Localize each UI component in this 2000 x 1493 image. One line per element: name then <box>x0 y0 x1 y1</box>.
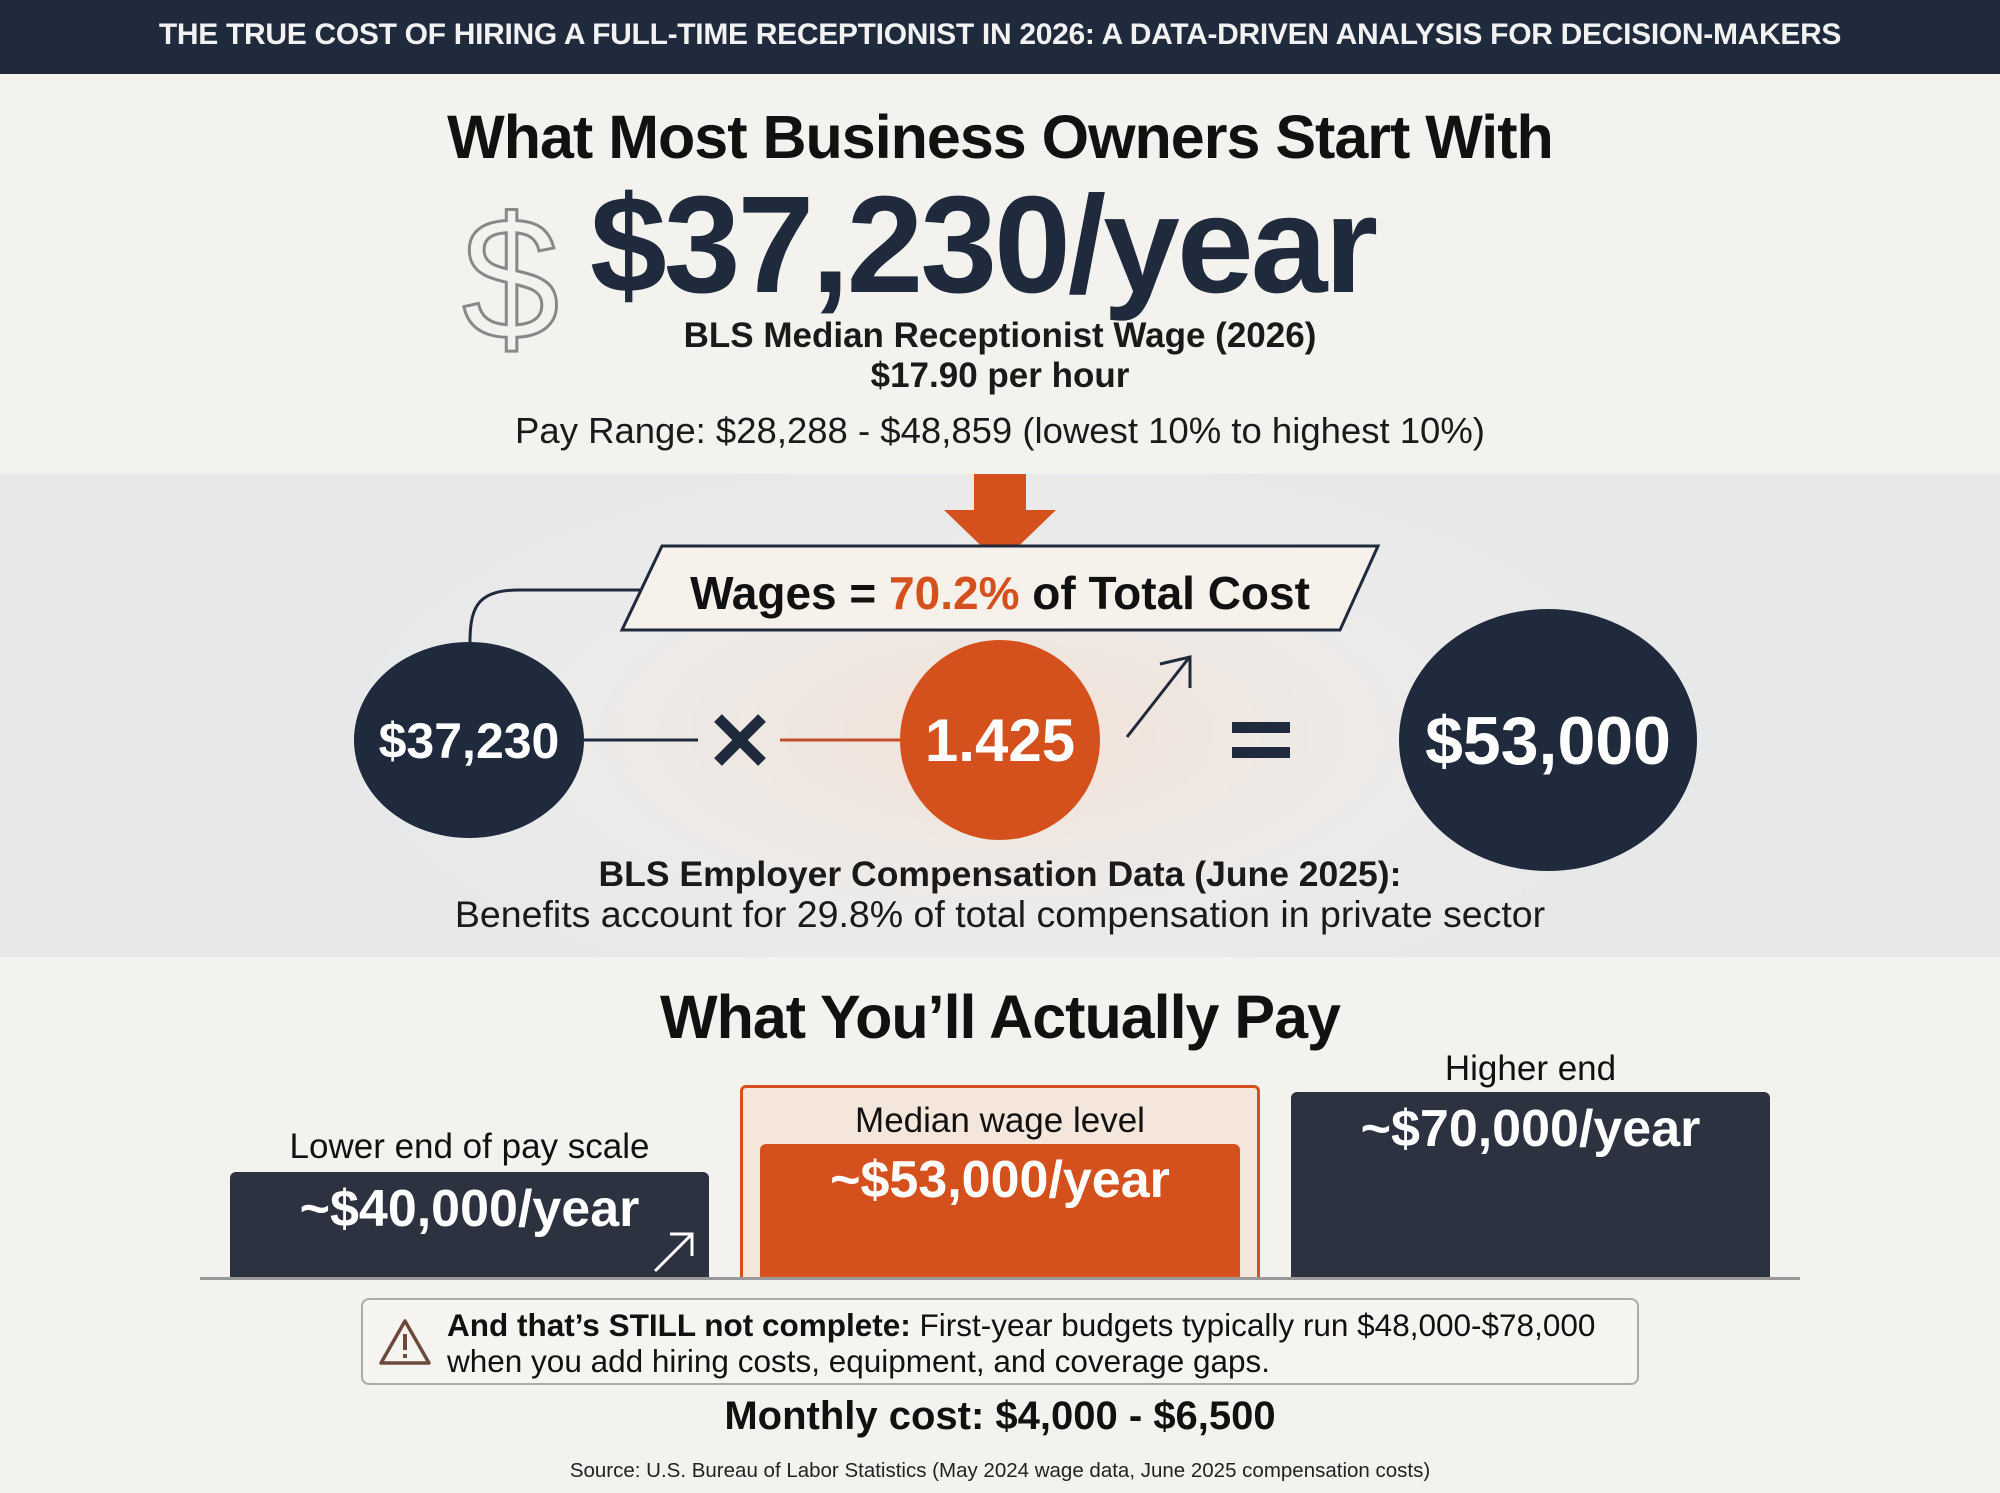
parallelogram box <box>622 546 1378 630</box>
benefits note: Benefits account for 29.8% of total compensation in private sector <box>455 893 1545 935</box>
circle: $37,230: $37,230 <box>379 713 559 769</box>
heading: what most start with: What Most Business Owners Start With <box>447 103 1553 171</box>
source: Source: U.S. Bureau of Labor Statistics (May 2024 wage data, June 2025 compensation costs) <box>570 1459 1430 1482</box>
formula diagram <box>354 544 1697 871</box>
wage subtitle: BLS Median Receptionist Wage (2026) <box>684 316 1316 355</box>
label median: Median wage level <box>855 1101 1145 1140</box>
circle: $37,230 <box>354 642 584 838</box>
circle: $53,000 <box>1399 609 1697 871</box>
heading: actually pay: What You’ll Actually Pay <box>660 983 1340 1051</box>
arrow down <box>944 474 1056 544</box>
label higher: Higher end <box>1445 1049 1616 1088</box>
small arrow up <box>1127 657 1190 737</box>
pay range: Pay Range: $28,288 - $48,859 (lowest 10% to highest 10%) <box>515 410 1485 451</box>
compensation data note: BLS Employer Compensation Data (June 2025): <box>599 854 1401 894</box>
bar: median: ~$53,000/year <box>830 1151 1170 1209</box>
top banner <box>0 0 2000 74</box>
circle: 1.425: 1.425 <box>925 707 1075 774</box>
bar: median <box>740 1085 1260 1278</box>
icon: warning <box>379 1319 431 1365</box>
bar: lower end <box>230 1127 709 1277</box>
bar: higher end <box>1291 1049 1770 1277</box>
callout: still not complete: And that’s STILL not complete: First-year budgets typically run $48,000-$78,000 <box>447 1307 1595 1343</box>
equals sign <box>1232 722 1290 758</box>
top banner: THE TRUE COST OF HIRING A FULL-TIME RECEPTIONIST IN 2026: A DATA-DRIVEN ANALYSIS FOR DECISION-MAKERS <box>159 18 1841 51</box>
multiply sign <box>718 718 762 762</box>
big wage number: $37,230/year <box>590 168 1375 322</box>
circle: $53,000: $53,000 <box>1425 703 1671 779</box>
monthly cost: Monthly cost: $4,000 - $6,500 <box>724 1394 1276 1438</box>
circle: 1.425 <box>900 640 1100 840</box>
hourly wage: $17.90 per hour <box>871 356 1129 395</box>
bar: higher end: ~$70,000/year <box>1361 1100 1700 1158</box>
callout: still not complete: when you add hiring costs, equipment, and coverage gaps. <box>447 1343 1270 1379</box>
bar: lower end: ~$40,000/year <box>300 1180 639 1238</box>
callout: still not complete <box>361 1298 1639 1385</box>
label lower: Lower end of pay scale <box>290 1127 649 1166</box>
small arrow <box>654 1232 694 1272</box>
connector line <box>470 590 640 642</box>
panel: formula band <box>0 474 2000 957</box>
parallelogram box: Wages = 70.2% of Total Cost <box>690 567 1310 619</box>
